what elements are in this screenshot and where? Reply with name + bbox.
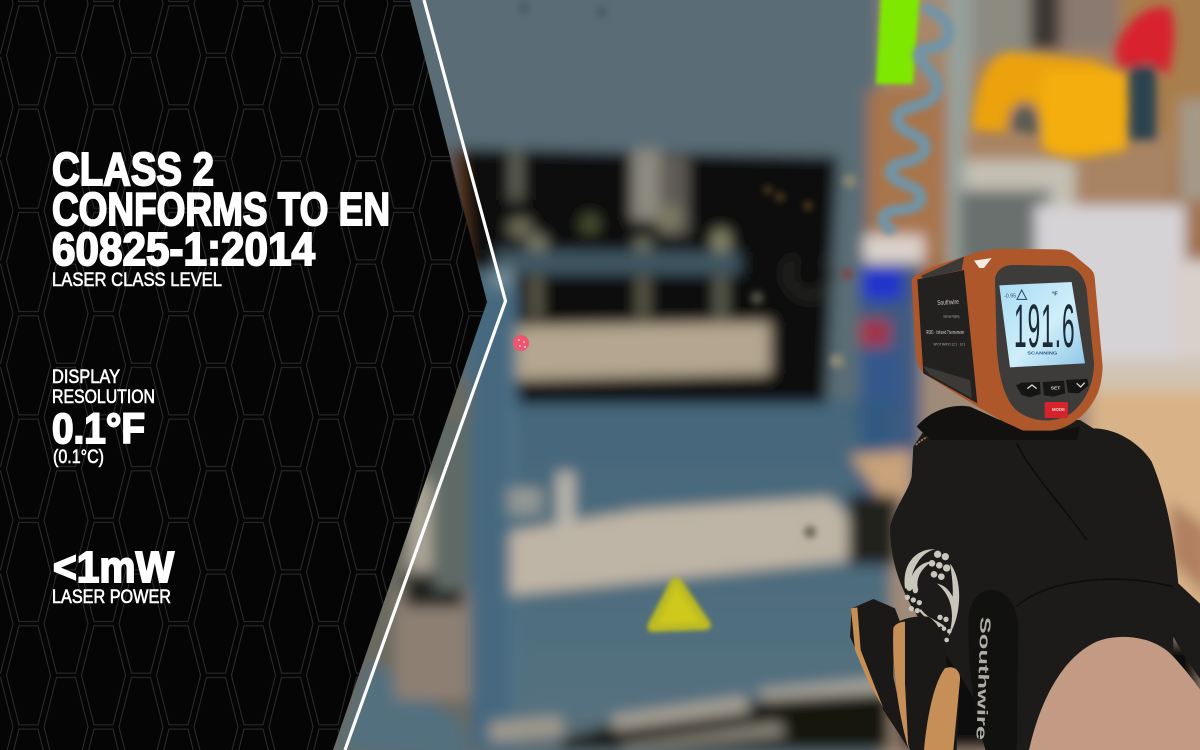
celsius value: (0.1°C) (53, 447, 104, 468)
yellow warning triangle sticker (648, 578, 711, 632)
thermometer side label panel: Dual Laser Targeting (943, 314, 959, 318)
red object in background (1115, 7, 1174, 140)
LCD display: SCANNING (1027, 350, 1058, 355)
laser power value: <1mW (53, 543, 174, 592)
display resolution caption: RESOLUTION (52, 387, 155, 408)
laser class value: CLASS 2 (52, 143, 214, 195)
green block in the background (876, 0, 920, 84)
glove stitching (916, 432, 989, 445)
thermometer side label panel: IR381 · Infrared Thermometer (926, 330, 964, 336)
white chevron line (345, 0, 506, 750)
black side panel with hexagon pattern (0, 0, 487, 750)
orange object on shelf (972, 52, 1130, 157)
laser power caption: LASER POWER (52, 587, 171, 608)
LCD display: °F (1052, 291, 1058, 297)
glove logo (905, 549, 959, 642)
stat: laser class (52, 143, 390, 291)
LCD display: -0.95 (1004, 293, 1016, 299)
thermometer side label panel (917, 257, 977, 403)
LCD display (999, 282, 1085, 367)
glove thumb tab with wordmark (968, 590, 1018, 750)
display resolution value: 0.1°F (52, 405, 145, 453)
laser class value: CONFORMS TO EN (52, 183, 390, 235)
stat: laser power (52, 543, 174, 608)
gloved hand holding the thermometer (850, 420, 1200, 750)
display resolution caption: DISPLAY (52, 367, 120, 388)
thermometer side label panel: Southwire (937, 299, 959, 307)
thermometer side label panel: SPOT RATIO 12:1 · 10:1 (933, 342, 965, 346)
display resolution caption (52, 367, 155, 408)
laser class value: 60825-1:2014 (52, 223, 315, 275)
glove fingers (850, 599, 960, 750)
LCD display: 191.6 (1014, 291, 1075, 360)
laser class caption: LASER CLASS LEVEL (52, 269, 222, 291)
thermometer buttons: SET (1051, 385, 1060, 391)
laser window (974, 258, 992, 268)
infrared thermometer (912, 249, 1103, 440)
stat: display resolution (52, 367, 155, 468)
grip underside shadow (917, 406, 1080, 440)
bare wrist (1028, 637, 1200, 750)
front grey bezel (995, 265, 1094, 420)
laser class value (52, 143, 390, 275)
red laser dot (513, 335, 529, 351)
glove thumb tab with wordmark: Southwire (972, 617, 993, 740)
glove creases (1017, 443, 1173, 607)
thermometer buttons (1016, 379, 1089, 418)
glove main body (890, 420, 1200, 750)
thermometer orange housing (912, 249, 1103, 431)
blue coiled hose (883, 7, 949, 233)
machine bolts and blurred details (518, 2, 857, 538)
thermometer buttons: MODE (1052, 407, 1065, 412)
